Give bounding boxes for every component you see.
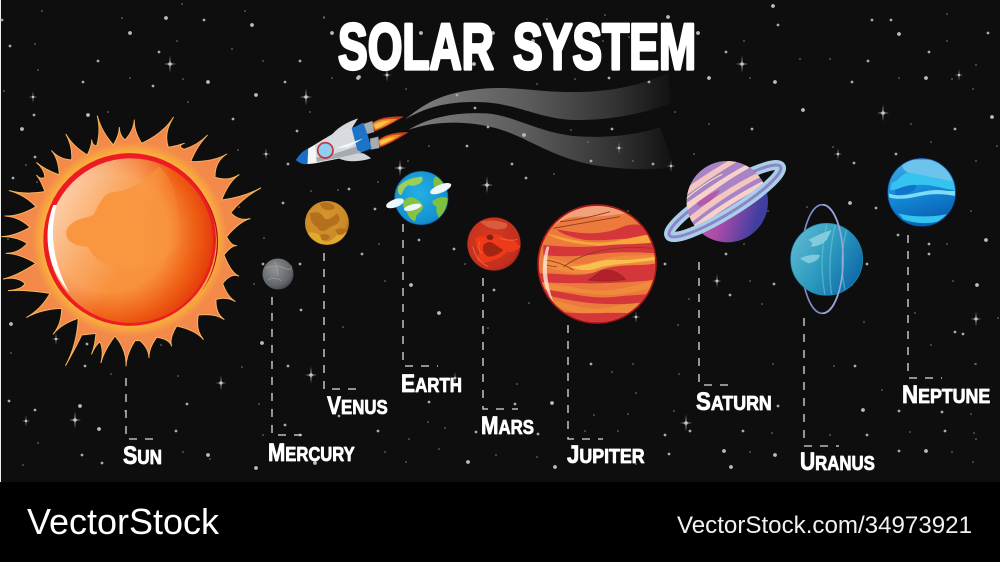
title: SOLAR SYSTEM — [338, 11, 696, 83]
saturn ring back — [663, 156, 787, 246]
saturn ring front — [669, 167, 787, 246]
rocket — [296, 116, 408, 164]
rocket body — [296, 127, 362, 164]
saturn — [664, 160, 786, 242]
label: Uranus: URANUS — [800, 447, 875, 475]
label: Saturn: SATURN — [696, 389, 772, 416]
rocket engines — [363, 121, 374, 134]
watermark logo text: VectorStock — [27, 501, 220, 542]
label: Sun: SUN — [123, 441, 162, 469]
neptune — [888, 158, 956, 226]
sun sphere — [43, 153, 216, 326]
label: Jupiter: JUPITER — [567, 442, 645, 469]
rocket fins — [332, 118, 358, 135]
uranus globe — [791, 223, 863, 295]
sparkle stars — [22, 56, 981, 432]
label: Earth: EARTH — [401, 369, 462, 397]
mars — [467, 217, 521, 271]
rocket flames — [372, 116, 404, 131]
earth — [385, 171, 453, 225]
label: Venus: VENUS — [327, 391, 388, 419]
saturn globe — [687, 161, 768, 242]
jupiter — [537, 203, 657, 327]
sun — [2, 116, 261, 366]
uranus ring back — [802, 205, 843, 313]
sun highlight crescent — [48, 205, 69, 293]
label: Neptune: NEPTUNE — [902, 382, 990, 409]
uranus ring front — [822, 205, 843, 313]
mercury — [262, 258, 294, 290]
watermark bar — [0, 482, 1000, 562]
venus — [305, 201, 349, 245]
rocket smoke trails — [405, 73, 674, 169]
label: Mercury: MERCURY — [268, 438, 355, 466]
sun corona rays — [2, 116, 261, 366]
label: Mars: MARS — [481, 411, 534, 439]
continents — [398, 177, 423, 195]
dashed leader lines — [126, 224, 942, 446]
sun surface patch — [66, 167, 180, 269]
uranus — [791, 205, 863, 313]
clouds — [385, 181, 453, 213]
rocket porthole — [318, 143, 333, 158]
watermark image id: VectorStock.com/34973921 — [677, 512, 972, 539]
